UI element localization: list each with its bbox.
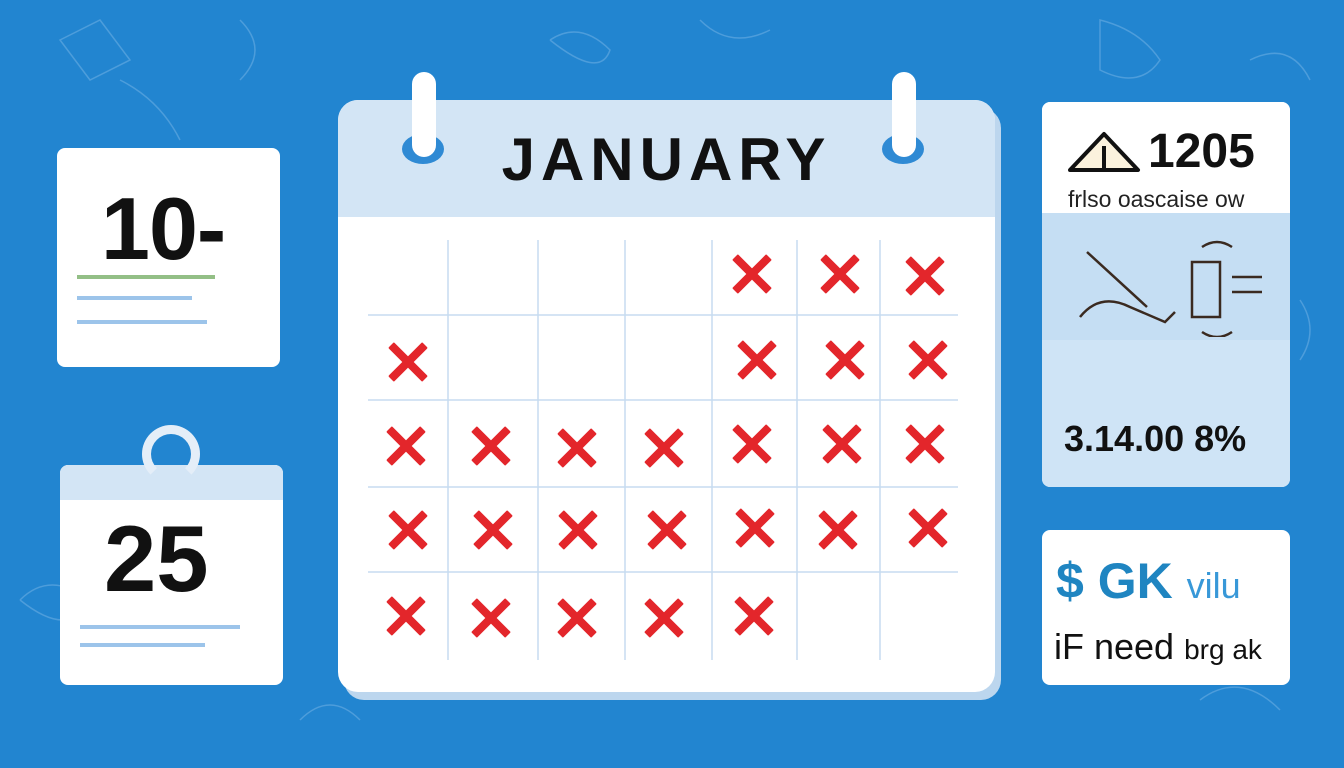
header: JANUARY <box>338 100 995 217</box>
panel: stats: frlso oascaise ow <box>1068 186 1244 212</box>
grid <box>368 240 958 660</box>
icon: warning triangle <box>1068 132 1140 172</box>
stat 1205: 1205 <box>1148 125 1255 178</box>
card: 10- <box>57 148 280 367</box>
panel: cost: $ GK vilu <box>1056 553 1241 609</box>
icon: small calendar rings <box>142 425 200 474</box>
panel: stats <box>1042 102 1290 487</box>
icons: tools <box>1079 240 1262 337</box>
rings <box>402 72 924 164</box>
number 10-: 10- <box>101 179 225 278</box>
panel: cost: iF need brg ak <box>1054 626 1262 667</box>
panel: cost <box>1042 530 1290 685</box>
header: JANUARY: JANUARY <box>502 126 831 193</box>
stat 3.14.00 8%: 3.14.00 8% <box>1064 418 1246 459</box>
main calendar <box>338 100 995 692</box>
number 25: 25 <box>104 506 209 611</box>
card: calendar 25 <box>60 465 283 685</box>
